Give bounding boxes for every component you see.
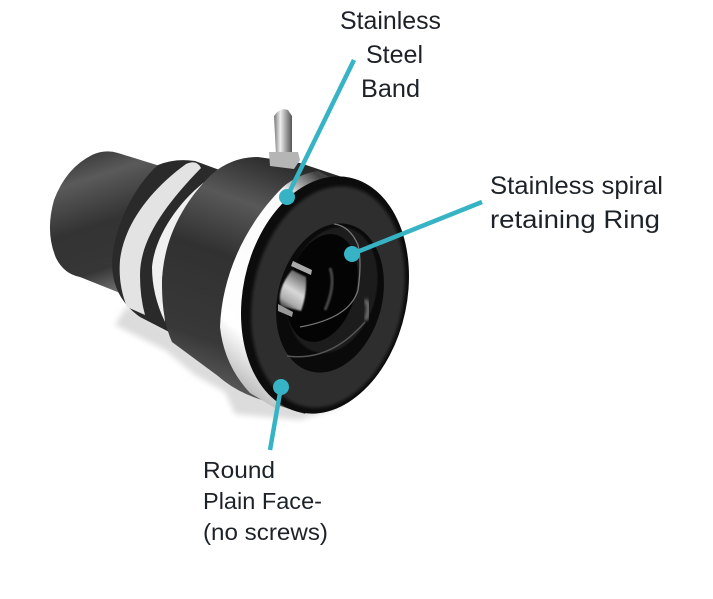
front face	[220, 161, 430, 429]
ground shadow	[115, 306, 345, 420]
pin	[274, 109, 292, 155]
label: Steel	[366, 41, 423, 69]
callout: spiral retaining ring	[344, 172, 663, 262]
label: retaining Ring	[490, 206, 660, 234]
stainless steel band	[220, 171, 335, 408]
leader dot	[344, 246, 360, 262]
label: Round	[203, 457, 275, 483]
product photo: seal	[50, 109, 430, 429]
sleeve slot upper	[291, 261, 312, 275]
label: Stainless	[340, 7, 441, 35]
leader dot	[273, 379, 289, 395]
callout: round plain face	[203, 379, 328, 545]
rear collar	[112, 160, 225, 335]
bore and spiral retaining ring	[260, 211, 400, 385]
callout: stainless steel band	[279, 7, 441, 205]
leader line	[270, 387, 281, 450]
leader dot	[279, 189, 295, 205]
main body	[162, 157, 345, 414]
inner silver sleeve	[280, 270, 306, 311]
sleeve slot lower	[278, 304, 293, 317]
label: Band	[361, 75, 420, 103]
label: Stainless spiral	[490, 172, 663, 200]
rear band narrow	[152, 178, 214, 322]
rear cylinder	[50, 151, 160, 295]
rear band wide	[120, 162, 201, 315]
leader line	[352, 202, 482, 254]
hex nut	[269, 152, 300, 169]
ring highlights	[300, 224, 360, 327]
leader line	[287, 60, 354, 197]
label: (no screws)	[203, 519, 328, 545]
label: Plain Face-	[203, 488, 322, 514]
